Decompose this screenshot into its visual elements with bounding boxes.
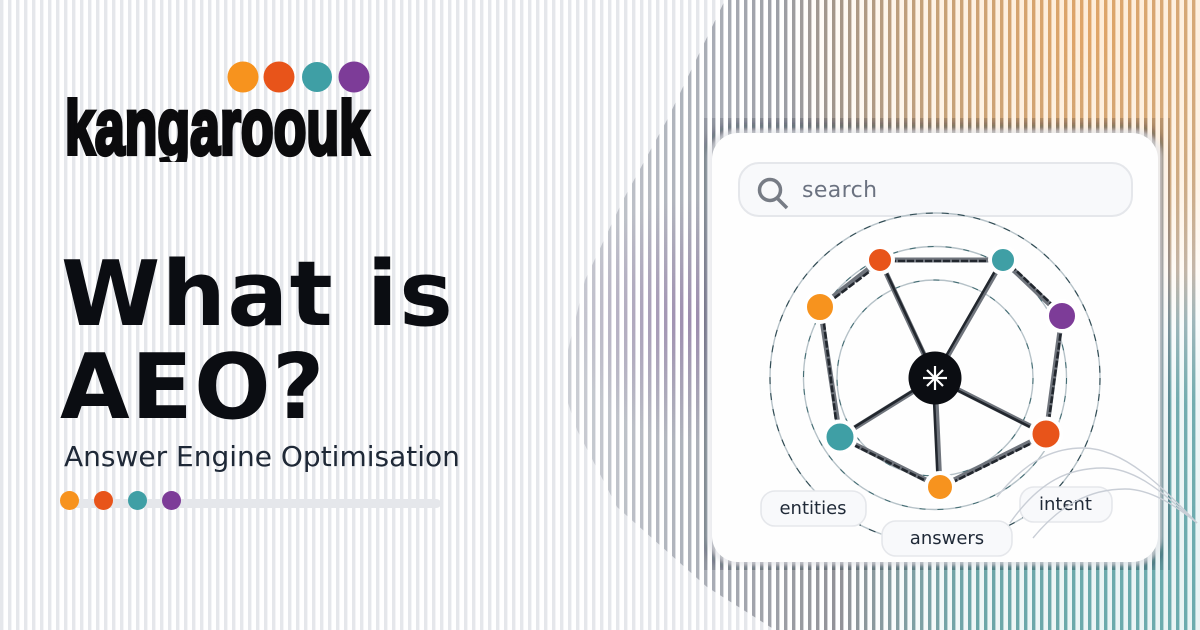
tag: answers: answers <box>910 528 984 549</box>
tag: answers <box>882 521 1012 556</box>
icon: asterisk spark <box>923 366 947 390</box>
title: What is <box>61 242 454 347</box>
icon: magnifying glass <box>760 180 787 208</box>
gradient glow panel <box>540 0 1200 630</box>
card <box>707 129 1163 566</box>
title <box>60 242 454 440</box>
logo wordmark: kangaroouk <box>65 82 369 171</box>
tag: intent: intent <box>1039 494 1092 515</box>
orbit rings <box>770 213 1100 543</box>
logo <box>65 62 370 171</box>
logo dots <box>228 62 370 92</box>
title: AEO? <box>60 335 326 440</box>
network nodes <box>805 247 1077 501</box>
tag: entities <box>761 491 866 526</box>
subtitle: Answer Engine Optimisation <box>64 440 460 473</box>
search text: search <box>802 178 877 203</box>
network links <box>820 259 1063 488</box>
tag: entities: entities <box>779 498 847 519</box>
progress track with dots <box>60 491 441 510</box>
decorative curves <box>997 448 1197 538</box>
search bar <box>739 163 1132 216</box>
card shadow <box>704 118 1170 570</box>
central hub <box>908 352 962 404</box>
tag: intent <box>1020 487 1112 522</box>
